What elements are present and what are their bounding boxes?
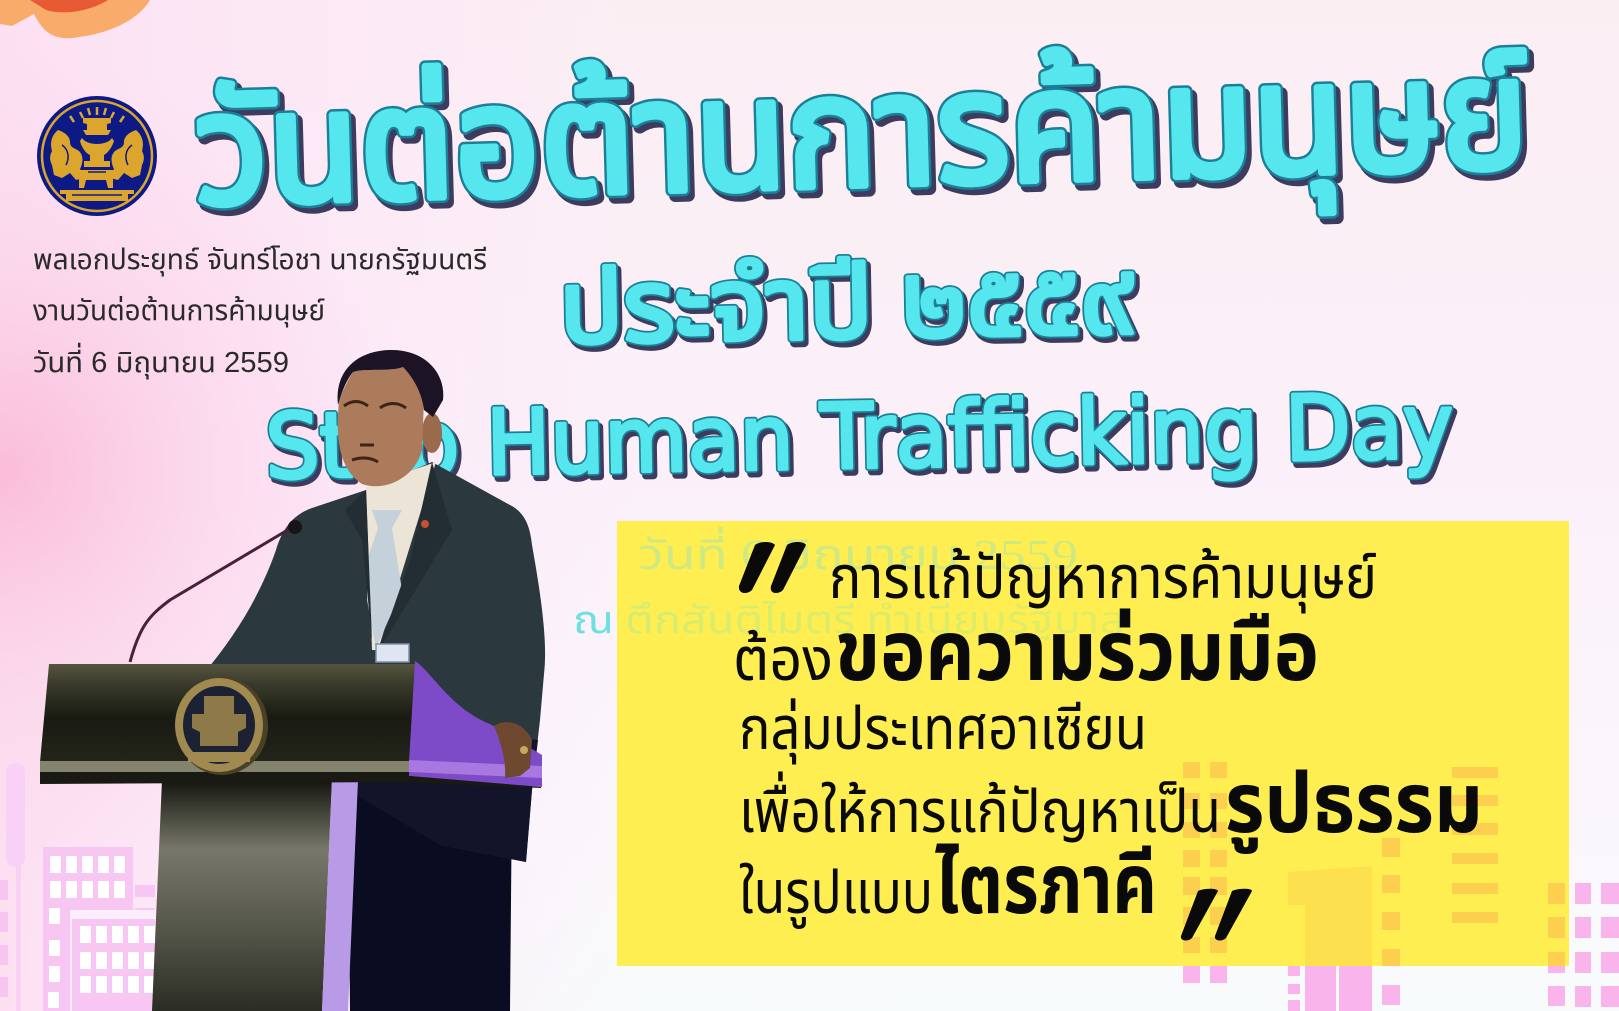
quote text: การแก้ปัญหาการค้ามนุษย์: [829, 544, 1377, 614]
screen title: Thai headline: วันต่อต้านการค้ามนุษย์: [196, 32, 1535, 250]
closing quote mark: [1181, 889, 1252, 940]
caption: speaker and event: งานวันต่อต้านการค้ามนุษย์: [33, 295, 325, 327]
caption: speaker and event: พลเอกประยุทธ์ จันทร์โอชา นายกรัฐมนตรี: [33, 244, 487, 276]
ear: [422, 413, 442, 453]
facial features: [344, 402, 406, 462]
screen title: year line: ประจำปี ๒๕๕๙: [561, 245, 1137, 369]
quote text: ในรูปแบบ: [739, 859, 933, 929]
hair: [338, 350, 443, 417]
screen title: Thai headline: วันต่อต้านการค้ามนุษย์: [192, 27, 1531, 245]
podium column: [152, 780, 358, 1011]
screen title: year line: ประจำปี ๒๕๕๙: [558, 241, 1134, 365]
quote text: ไตรภาคี: [935, 837, 1157, 931]
quote text: ขอความร่วมมือ: [835, 604, 1319, 698]
lapel: [378, 462, 452, 652]
quote text: เพื่อให้การแก้ปัญหาเป็น: [739, 771, 1221, 845]
screen title: English line: Stop Human Trafficking Day: [265, 374, 1454, 500]
yellow quote panel: [617, 521, 1569, 966]
faded screen text behind panel: วันที่ 6 มิถุนายน 2559: [638, 526, 1078, 580]
quote text: [733, 542, 1483, 940]
water glass: [376, 644, 409, 662]
quote text: ต้อง: [733, 626, 833, 693]
faded screen text behind panel: [573, 526, 1125, 642]
podium seal: [175, 677, 268, 775]
opening quote mark: [739, 542, 806, 593]
screen title: year line: ประจำปี ๒๕๕๙: [558, 241, 1134, 365]
seal: Office of the Prime Minister: [37, 96, 157, 216]
suit jacket: [205, 462, 545, 862]
caption: speaker and event: [33, 244, 487, 379]
screen title: Thai headline: วันต่อต้านการค้ามนุษย์: [192, 27, 1531, 245]
caption: speaker and event: วันที่ 6 มิถุนายน 2559: [33, 342, 289, 379]
pink city buildings right: [1183, 883, 1619, 1011]
orange sun shape at top left: [0, 0, 150, 38]
faded screen text behind panel: ณ ตึกสันติไมตรี ทำเนียบรัฐบาล: [573, 600, 1125, 642]
podium top: [40, 661, 542, 788]
trousers: [348, 790, 512, 1011]
shirt: [366, 462, 436, 650]
pink city buildings left: [0, 763, 155, 1011]
screen title: English line: Stop Human Trafficking Day: [268, 378, 1457, 504]
speaker figure: [205, 350, 545, 1011]
quote text: กลุ่มประเทศอาเซียน: [739, 695, 1147, 765]
pin: [421, 520, 429, 528]
speaker hand on podium: [494, 722, 532, 778]
quote text: รูปธรรม: [1225, 756, 1483, 854]
face: [338, 367, 424, 486]
screen title: English line: Stop Human Trafficking Day: [265, 374, 1454, 500]
microphone: [130, 520, 302, 662]
tie: [367, 510, 402, 648]
